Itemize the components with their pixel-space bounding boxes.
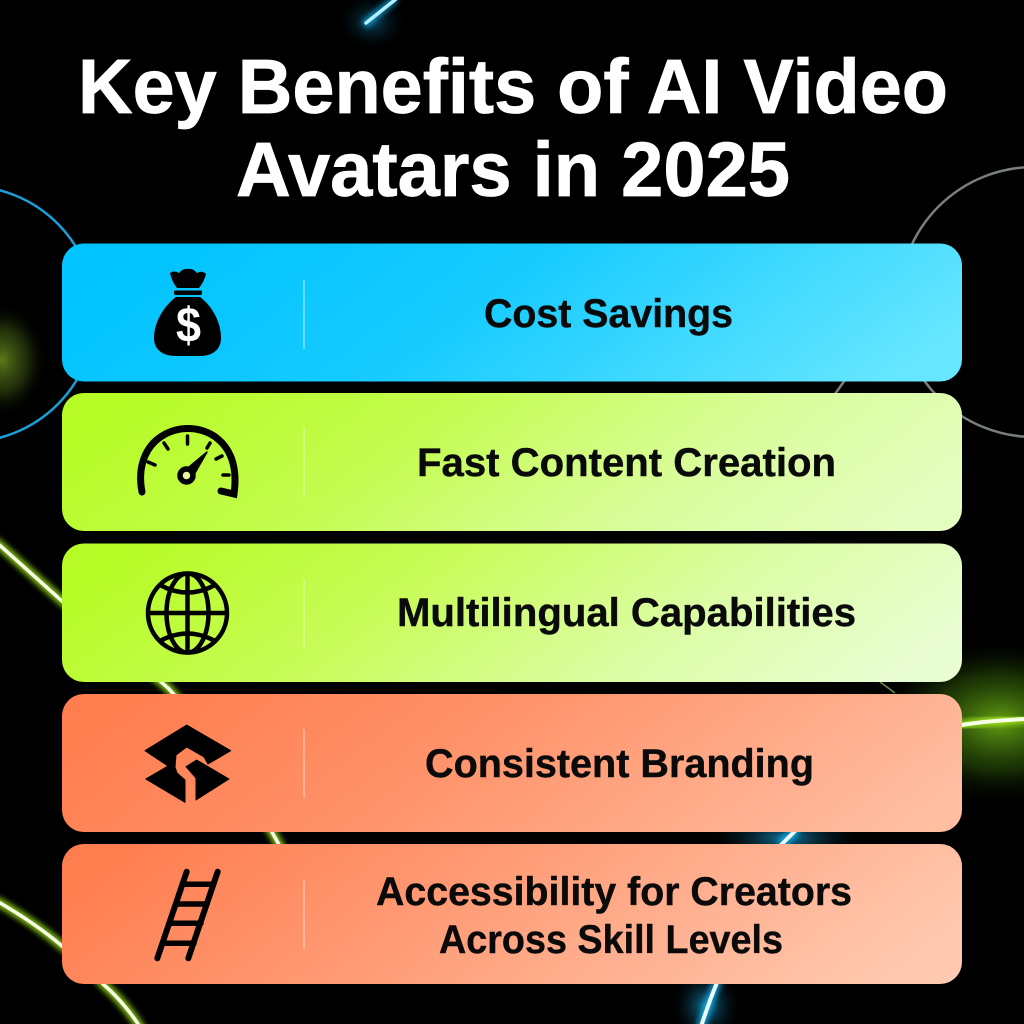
background glow: cyan lower bbox=[670, 966, 742, 1024]
panel: Accessibility for Creators Across Skill Levels bbox=[62, 844, 962, 984]
title: Key Benefits of AI Video bbox=[78, 44, 948, 130]
icon: branding mark bbox=[145, 725, 231, 802]
background glow: cyan top bbox=[336, 0, 408, 52]
decoration: grey arc segment bbox=[835, 380, 845, 394]
neon line: green lower left bbox=[0, 900, 142, 1024]
label: Accessibility for Creators Across Skill Levels: Across Skill Levels bbox=[439, 918, 783, 962]
neon line: green right bbox=[955, 719, 1024, 726]
icon: money bag bbox=[154, 269, 221, 356]
background glow: cyan bottom bbox=[706, 808, 866, 868]
icon: money bag: $ bbox=[176, 299, 201, 353]
panel background: lime bbox=[62, 393, 962, 531]
label: Cost Savings: Cost Savings bbox=[484, 292, 733, 336]
neon line: green upper left bbox=[0, 541, 282, 850]
label: Multilingual Capabilities: Multilingual Capabilities bbox=[397, 591, 856, 635]
panel background: lime light bbox=[62, 544, 962, 682]
panel background: blue bbox=[62, 244, 962, 382]
label: Consistent Branding: Consistent Branding bbox=[425, 742, 814, 786]
decoration: grey circle right bbox=[899, 167, 1024, 437]
background glow: left olive bbox=[0, 302, 48, 418]
panel background: orange bbox=[62, 694, 962, 832]
background glow: right green bbox=[870, 637, 1024, 807]
decoration: blue circle left bbox=[0, 186, 95, 442]
title bbox=[78, 44, 948, 213]
label: Accessibility for Creators Across Skill Levels bbox=[376, 870, 852, 962]
decoration: faint green streak bbox=[880, 682, 895, 693]
label: Accessibility for Creators Across Skill Levels: Accessibility for Creators bbox=[376, 870, 852, 914]
icon: speedometer bbox=[141, 428, 235, 494]
label: Fast Content Creation: Fast Content Creation bbox=[417, 441, 836, 485]
panel: Consistent Branding bbox=[62, 694, 962, 832]
panel: Multilingual Capabilities bbox=[62, 544, 962, 682]
icon: ladder bbox=[157, 872, 218, 958]
panel: Cost Savings bbox=[62, 244, 962, 382]
panel background: orange light bbox=[62, 844, 962, 984]
neon line: cyan lower right bbox=[700, 828, 798, 1024]
neon line: top cyan bbox=[364, 0, 396, 25]
panel: Fast Content Creation bbox=[62, 393, 962, 531]
title: Avatars in 2025 bbox=[236, 127, 790, 213]
icon: globe bbox=[148, 574, 227, 652]
